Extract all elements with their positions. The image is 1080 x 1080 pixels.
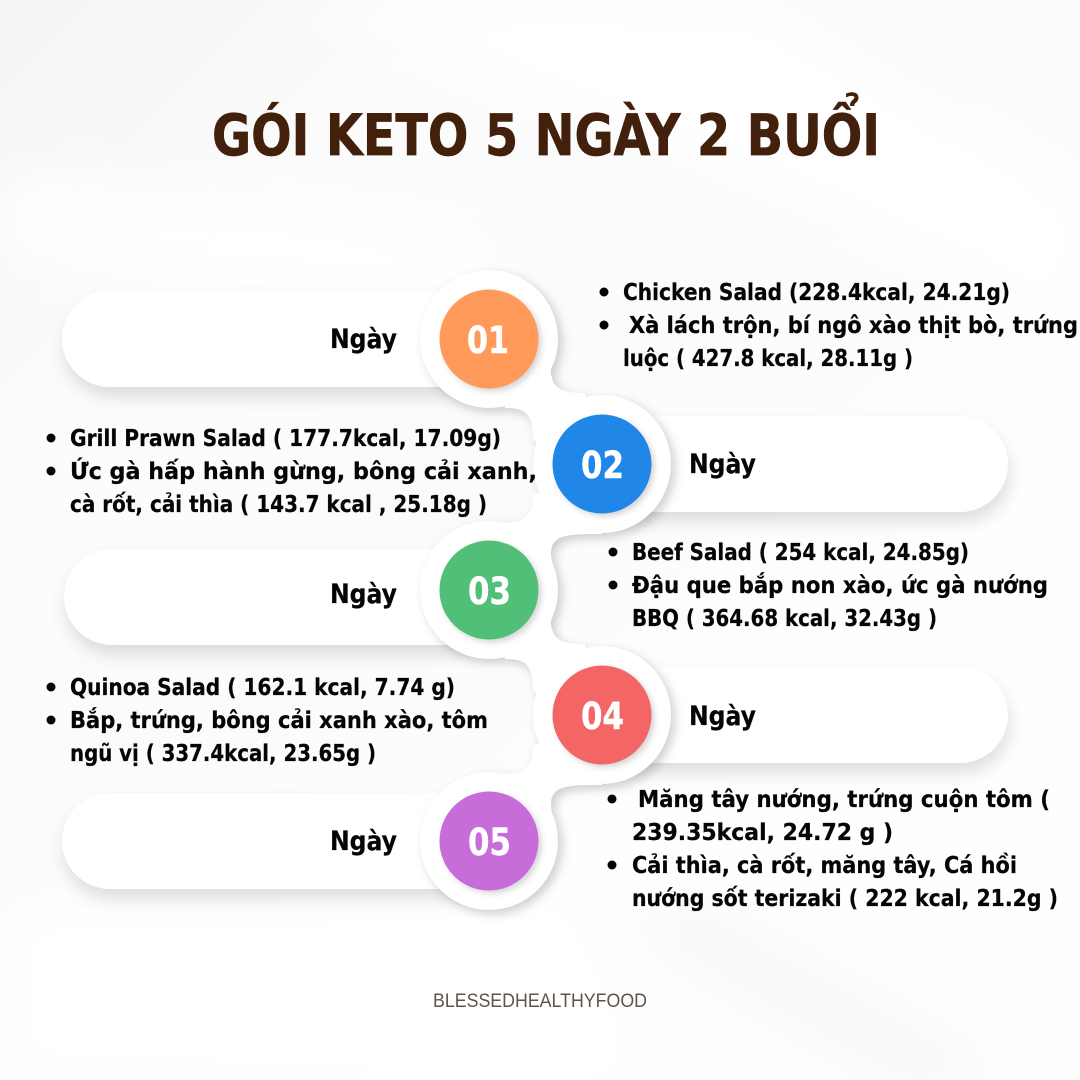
label: Ngày 4: Ngày (689, 701, 756, 732)
text block: day 2 menu (46, 426, 537, 518)
pill: day 3 bar (64, 549, 502, 645)
badge 05 (440, 792, 538, 890)
pills: day bars (62, 291, 1008, 889)
pill: day 5 bar (62, 793, 502, 889)
badge 05: 05 (468, 821, 511, 864)
text block: day 3 menu: BBQ ( 364.68 kcal, 32.43g ) (632, 606, 937, 632)
badge 02: 02 (581, 444, 624, 487)
pill: day 2 bar (600, 416, 1008, 512)
badge 01: 01 (467, 319, 509, 362)
day 4 block (46, 666, 756, 767)
day 1 block (330, 280, 1078, 388)
label: Ngày 1: Ngày (330, 324, 397, 355)
text block: day 4 menu: ngũ vị ( 337.4kcal, 23.65g ) (70, 741, 376, 767)
badge 02 (552, 414, 652, 514)
text block: day 2 menu: Ức gà hấp hành gừng, bông cải xanh, (70, 457, 537, 485)
label: Ngày 3: Ngày (330, 579, 397, 610)
text block: day 3 menu: Beef Salad ( 254 kcal, 24.85g) (632, 540, 969, 566)
text block: day 5 menu (608, 787, 1058, 912)
text block: day 5 menu: 239.35kcal, 24.72 g ) (632, 820, 893, 846)
label: Ngày 5: Ngày (330, 826, 397, 857)
footer brand: BLESSEDHEALTHYFOOD (433, 991, 647, 1012)
title: GÓI KETO 5 NGÀY 2 BUỔI (212, 92, 880, 169)
pill: day 4 bar (600, 667, 1008, 763)
text block: day 4 menu (46, 675, 488, 767)
text block: day 3 menu: Đậu que bắp non xào, ức gà nướng (632, 572, 1048, 599)
pill: day 1 bar (62, 291, 502, 387)
text block: day 3 menu (608, 540, 1048, 632)
text block: day 1 menu (600, 280, 1078, 372)
badge 01 (440, 290, 538, 388)
label: Ngày 2: Ngày (689, 449, 756, 480)
badge 03: 03 (468, 570, 511, 613)
badge 04: 04 (581, 695, 624, 738)
day 3 block (330, 540, 1048, 640)
text block: day 5 menu: Cải thìa, cà rốt, măng tây, Cá hồi (632, 852, 1017, 879)
text block: day 2 menu: Grill Prawn Salad ( 177.7kcal, 17.09g) (70, 426, 501, 452)
text block: day 1 menu: luộc ( 427.8 kcal, 28.11g ) (623, 346, 913, 372)
badge 04 (552, 666, 652, 764)
text block: day 4 menu: Bắp, trứng, bông cải xanh xào, tôm (70, 707, 488, 734)
text block: day 2 menu: cà rốt, cải thìa ( 143.7 kcal , 25.18g ) (70, 491, 487, 518)
badge 03 (440, 540, 538, 640)
text block: day 4 menu: Quinoa Salad ( 162.1 kcal, 7.74 g) (70, 675, 455, 701)
connecting white chain behind the number circles (420, 270, 671, 910)
day 2 block (46, 414, 756, 518)
day 5 block (330, 787, 1058, 912)
text block: day 1 menu: Chicken Salad (228.4kcal, 24.21g) (623, 280, 1010, 306)
text block: day 5 menu: Măng tây nướng, trứng cuộn tôm ( (638, 787, 1050, 813)
